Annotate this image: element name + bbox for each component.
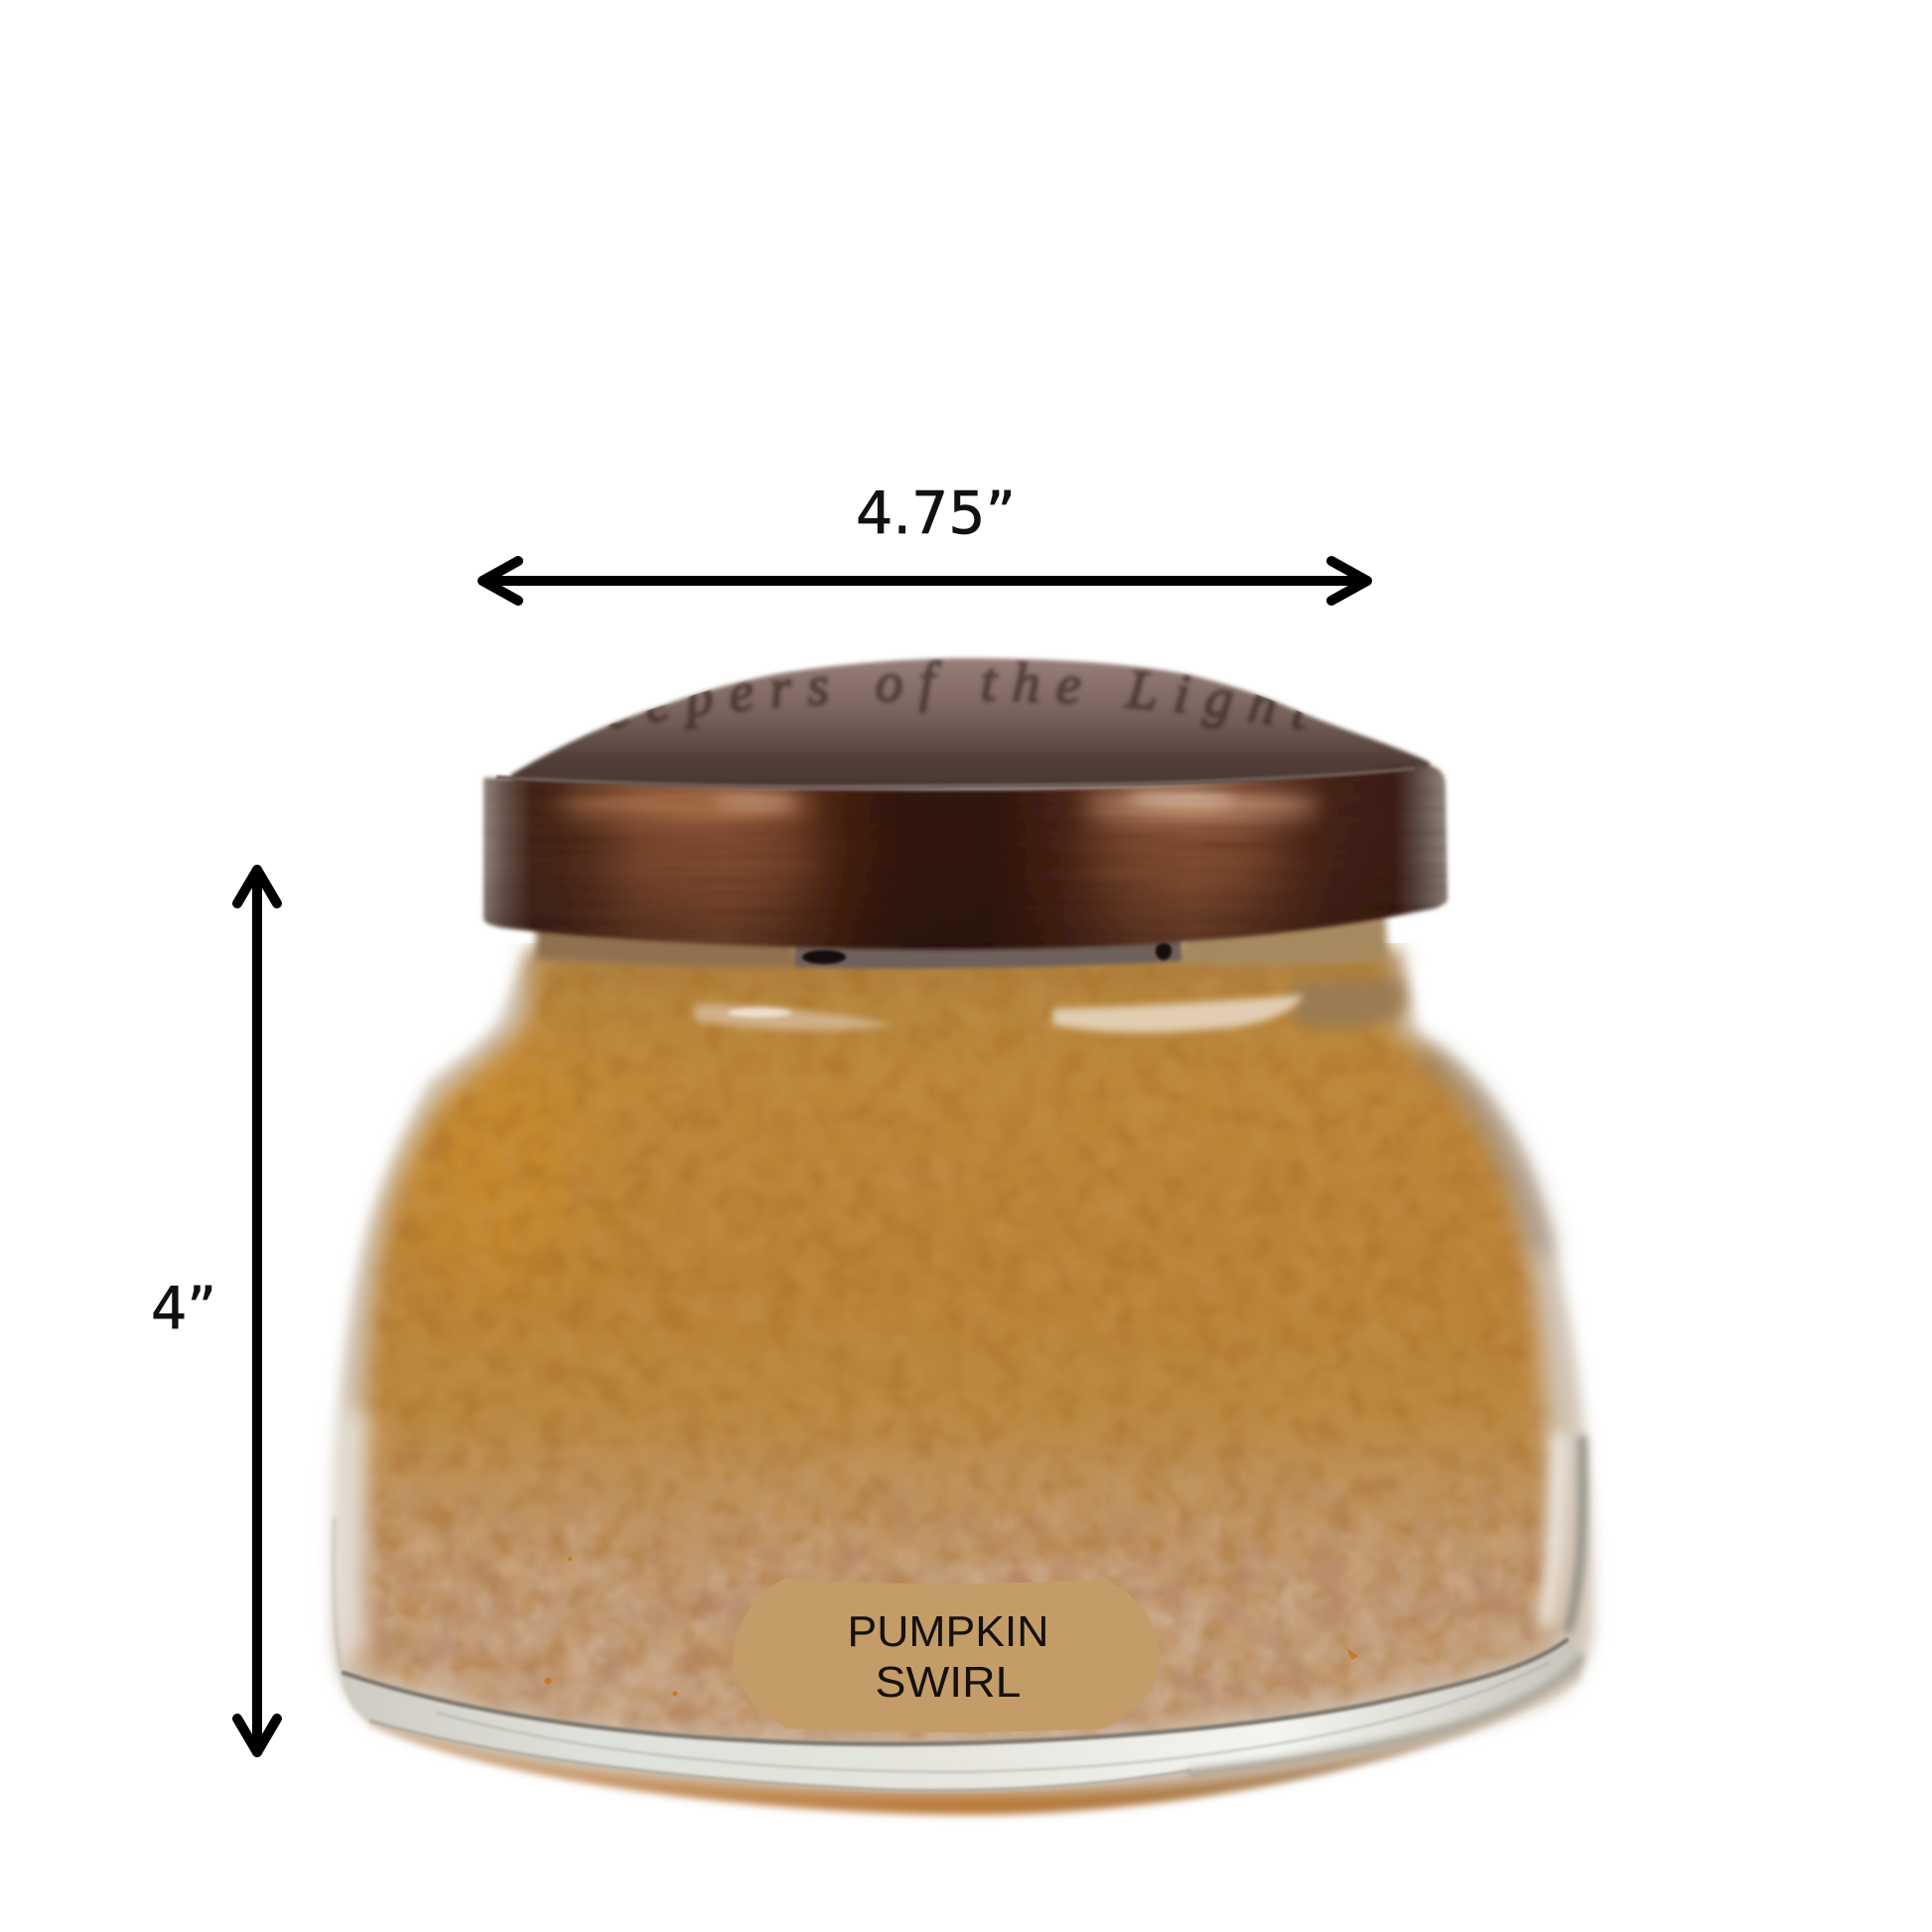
width label: 4.75” (856, 479, 1016, 547)
neck dark lobe (1291, 978, 1405, 1028)
grey right glass line (1569, 1440, 1583, 1628)
grey left outline (334, 1519, 341, 1668)
infographic: candle jar with dimensions (153, 490, 1601, 1822)
pale glass right highlight (1545, 1440, 1559, 1623)
right shoulder shading (1420, 1054, 1544, 1256)
neck highlight left (695, 1005, 894, 1031)
orange glow upper left (429, 1058, 566, 1261)
copper glow right (1092, 794, 1271, 913)
orange specks (544, 1557, 1358, 1696)
product label (734, 1579, 1160, 1732)
height label: 4” (151, 1274, 216, 1342)
candle wax (318, 943, 1608, 1767)
lid seam (496, 768, 1415, 787)
wax mottling dark (353, 971, 1557, 1741)
embossed lid text: Keepers of the Light (585, 659, 1307, 737)
candle jar (324, 655, 1601, 1822)
label text line 2: SWIRL (876, 1658, 1021, 1707)
lid dome (508, 655, 1433, 789)
seal spot right (1156, 942, 1172, 960)
lid (481, 655, 1450, 952)
width dimension arrow (483, 561, 1367, 601)
neck highlight right (1052, 995, 1304, 1033)
grey rim line (344, 1640, 1567, 1744)
copper highlight left (556, 790, 814, 818)
pale blotches in lower wax (366, 1472, 1537, 1739)
shadow under jar (369, 1648, 1579, 1815)
neck seal strip (536, 908, 1388, 969)
copper glow left (621, 794, 809, 913)
lid band (477, 759, 1459, 953)
height dimension arrow (237, 870, 277, 1752)
copper highlight right (1082, 792, 1320, 820)
label text line 1: PUMPKIN (848, 1607, 1048, 1656)
glass jar body (333, 951, 1593, 1793)
wax mottling light (389, 972, 1531, 1720)
pale glass left edge (346, 1420, 353, 1648)
glass base rim (341, 1638, 1585, 1790)
neck highlight core (728, 1008, 791, 1018)
seal spot left (802, 950, 846, 964)
